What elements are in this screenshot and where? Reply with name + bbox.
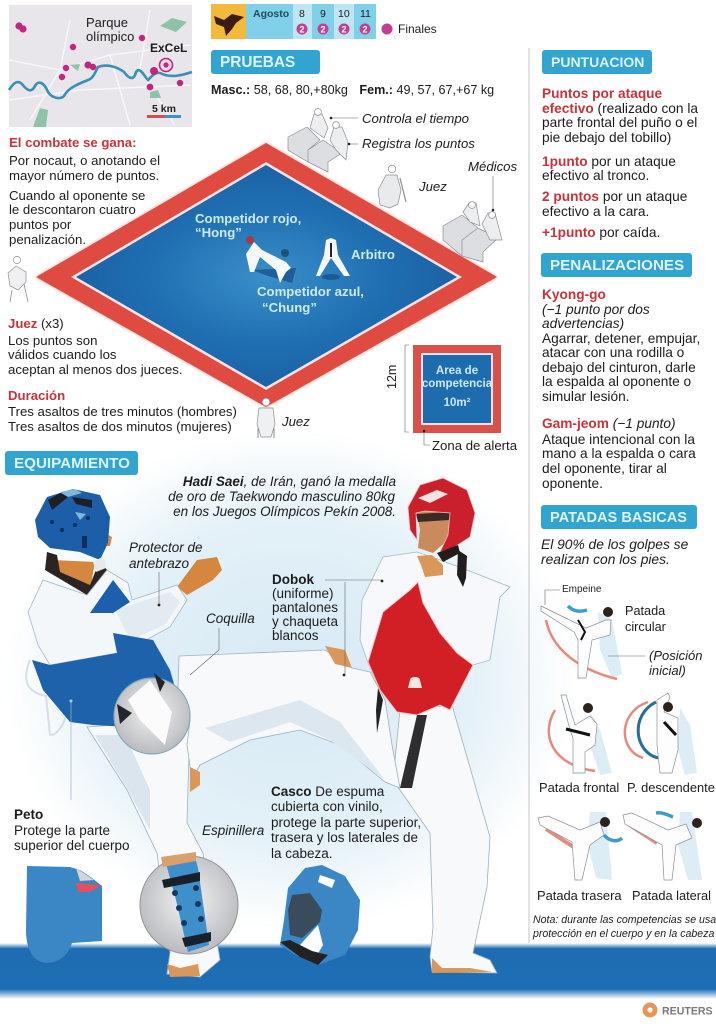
diagram: competition mat: Arbitro: [351, 247, 395, 262]
calendar strip: 11: [360, 8, 371, 20]
text: combat wins: [9, 135, 160, 247]
kick: downward: P. descendente: [627, 780, 715, 795]
text: combat wins: El combate se gana:: [9, 135, 137, 150]
label: doctors: [468, 159, 518, 211]
hands: [417, 555, 443, 577]
blue protector upper: [90, 580, 130, 613]
back strap: [26, 660, 66, 735]
fighters on mat: [246, 236, 296, 283]
diagram: competition mat: [36, 143, 497, 407]
label: forearm guard: Protector de: [129, 540, 203, 555]
chin strap: [437, 545, 460, 562]
heading: pruebas: PRUEBAS: [220, 54, 295, 71]
judge top right: [378, 165, 406, 208]
text: combat wins: le descontaron cuatro: [9, 202, 136, 217]
text: penalties: debajo del cinturon, darle: [542, 360, 696, 375]
label: doctors: Médicos: [468, 159, 518, 174]
calendar strip: [211, 4, 437, 39]
text: scoring: parte frontal del puño o el: [542, 115, 697, 130]
map: London venues: Parque: [86, 15, 128, 30]
heading: equipment: EQUIPAMIENTO: [14, 455, 130, 472]
label: helmet text: trasera y los laterales de: [271, 830, 418, 845]
Reuters logo: [642, 1002, 713, 1018]
heading: equipment: [5, 451, 138, 475]
calendar strip: Finales: [398, 22, 437, 36]
text: judges: válidos cuando los: [8, 347, 117, 362]
judge bottom: [257, 398, 275, 438]
text: scoring: efectivo a la cara.: [542, 204, 649, 219]
label: shin guard: Espinillera: [202, 823, 265, 838]
label: helmet text: Casco De espuma: [271, 784, 385, 799]
caption: Hadi Saei: Hadi Saei, de Irán, ganó la medalla: [183, 474, 396, 489]
referee on mat: [316, 238, 350, 280]
text: scoring: 2 puntos por un ataque: [542, 189, 687, 204]
heading: basic kicks: [541, 505, 697, 529]
text: penalties: [542, 287, 700, 491]
calendar strip: 8: [299, 8, 305, 20]
calendar strip: 2: [341, 24, 347, 34]
kick: side: Patada lateral: [632, 888, 711, 903]
kick: circular: [541, 584, 702, 679]
kicking foot: [190, 767, 200, 792]
kick: circular: (Posición: [649, 648, 702, 663]
text: combat wins: Cuando al oponente se: [9, 188, 145, 203]
helmet: [408, 478, 475, 552]
jacket: [28, 570, 187, 665]
text: penalties: Ataque intencional con la: [542, 432, 695, 447]
calendar strip: 2: [362, 24, 368, 34]
label: records points: Registra los puntos: [362, 136, 475, 151]
note: Nota: durante las competencias se usa: [533, 914, 716, 926]
text: combat wins: penalización.: [9, 232, 86, 247]
note: [532, 914, 716, 940]
label: judge: Juez: [418, 179, 447, 194]
kick: circular: inicial): [649, 663, 686, 678]
heading: penalties: PENALIZACIONES: [550, 257, 684, 274]
column divider: [528, 48, 530, 945]
text: kicks intro: realizan con los pies.: [541, 552, 670, 567]
note: protección en el cuerpo y en la cabeza: [532, 928, 714, 940]
text: combat wins: puntos por: [9, 217, 72, 232]
belt: [400, 715, 427, 788]
text: combat wins: Por nocaut, o anotando el: [9, 153, 160, 168]
diagram: competition area square: 10m²: [444, 397, 471, 409]
jacket: [360, 552, 510, 690]
floor: [0, 943, 716, 999]
kick: back: Patada trasera: [537, 888, 622, 903]
label: dobok: pantalones: [272, 600, 338, 615]
skin: neck, face, fist: [53, 532, 222, 595]
label: judge bottom: Juez: [281, 414, 310, 429]
kick: back: [537, 812, 622, 903]
map: London venues: 5 km: [152, 103, 176, 115]
weight classes: Masc.: 58, 68, 80,+80kg Fem.: 49, 57, 67,+67 kg: [211, 83, 494, 97]
text: penalties: simular lesión.: [542, 389, 629, 404]
label: dobok: [272, 572, 383, 676]
text: penalties: del oponente, tirar al: [542, 461, 667, 476]
diagram: competition area square: Zona de alerta: [432, 438, 518, 453]
fighter: blue: [26, 489, 222, 977]
text: penalties: Agarrar, detener, empujar,: [542, 331, 700, 346]
text: penalties: Kyong-go: [542, 287, 606, 302]
kicking leg: [178, 650, 400, 788]
heading: penalties: [541, 253, 692, 277]
standing leg: [393, 705, 497, 973]
heading: scoring: PUNTUACION: [551, 54, 644, 70]
fighter: red: [178, 478, 510, 973]
text: kicks intro: [541, 537, 689, 567]
map: London venues: olímpico: [86, 29, 134, 44]
leader: chest guard: [70, 700, 72, 800]
label: chest guard: Protege la parte: [14, 823, 110, 838]
Reuters logo: REUTERS: [662, 1006, 713, 1018]
map: London venues: ExCeL: [150, 41, 187, 55]
text: judges: Juez (x3): [8, 316, 64, 331]
kick: circular: Empeine: [562, 584, 602, 595]
text: penalties: oponente.: [542, 476, 603, 491]
equipment: chest protector: [26, 866, 102, 963]
helmet: [35, 489, 110, 560]
diagram: competition mat: Competidor rojo,: [195, 211, 301, 226]
calendar strip: 9: [320, 8, 326, 20]
text: penalties: mano a la espalda o cara: [542, 446, 696, 461]
officials: timekeeper and scorer: [288, 109, 348, 172]
kick: circular: circular: [625, 620, 667, 634]
diagram: competition area square: 12m: [385, 365, 399, 389]
magnifier: shin guard: [140, 852, 238, 954]
kick: front: Patada frontal: [539, 780, 619, 795]
leader: forearm: [158, 572, 160, 606]
text: scoring: Puntos por ataque: [542, 86, 663, 101]
text: judges: aceptan al menos dos jueces.: [8, 362, 182, 377]
magnifier: groin guard: [114, 673, 190, 754]
kick: side: [623, 812, 711, 903]
label: dobok: (uniforme): [272, 586, 334, 601]
calendar strip: 2: [299, 24, 305, 34]
label: chest guard: Peto: [14, 807, 43, 822]
text: penalties: la espalda al oponente o: [542, 374, 692, 389]
text: scoring: efectivo (realizado con la: [542, 101, 698, 116]
blue protector lower: [32, 633, 180, 727]
doctors: [443, 202, 502, 262]
equipment: helmet: [280, 865, 360, 965]
caption: Hadi Saei: [168, 474, 396, 519]
diagram: competition area square: Area de: [436, 365, 478, 377]
label: controls time: Controla el tiempo: [362, 111, 469, 126]
kick: circular: Patada: [625, 604, 666, 618]
text: duration: [8, 388, 237, 434]
calendar strip: 10: [338, 8, 350, 20]
label: helmet text: la cabeza.: [271, 846, 333, 861]
caption: Hadi Saei: de oro de Taekwondo masculino 80kg: [168, 489, 395, 504]
text: judges: Los puntos son: [8, 333, 97, 348]
text: scoring: 1punto por un ataque: [542, 154, 676, 169]
diagram: competition area square: competencia: [422, 378, 493, 390]
diagram: competition mat: Competidor azul,: [257, 284, 364, 299]
label: helmet text: [271, 784, 421, 861]
calendar strip: 2: [320, 24, 326, 34]
text: penalties: (−1 punto por dos: [542, 302, 650, 317]
text: penalties: Gam-jeom (−1 punto): [542, 416, 676, 431]
label: dobok: Dobok: [272, 572, 314, 587]
text: duration: Tres asaltos de dos minutos (mujeres): [8, 419, 232, 434]
label: chest guard: [14, 807, 130, 853]
collar: [45, 552, 107, 595]
diagram: competition mat: “Chung”: [262, 300, 317, 315]
background wash behind fighters: [5, 430, 575, 930]
label: groin guard: Coquilla: [206, 611, 255, 626]
caption: Hadi Saei: en los Juegos Olímpicos Pekín 2008.: [173, 504, 396, 519]
text: kicks intro: El 90% de los golpes se: [541, 537, 689, 552]
label: dobok: y chaqueta: [272, 614, 339, 629]
heading: pruebas: [211, 50, 320, 74]
text: duration: Tres asaltos de tres minutos (hombres): [8, 404, 237, 419]
kick: front: [539, 695, 619, 795]
map: London venues: [9, 5, 192, 127]
label: dobok: blancos: [272, 628, 319, 643]
label: groin guard: [190, 611, 255, 675]
calendar strip: Agosto: [253, 8, 289, 20]
label: helmet text: cubierta con vinilo,: [271, 799, 383, 814]
standing leg: [87, 720, 220, 977]
text: duration: Duración: [8, 388, 65, 403]
kick: downward: [625, 693, 715, 795]
text: judges: [8, 316, 182, 377]
face: [416, 510, 450, 553]
heading: basic kicks: PATADAS BASICAS: [550, 510, 687, 526]
diagram: competition area square: [385, 345, 518, 453]
label: helmet text: protege la parte superior,: [271, 815, 421, 830]
heading: scoring: [542, 50, 652, 74]
text: penalties: atacar con una rodilla o: [542, 345, 685, 360]
red protector: [368, 582, 473, 715]
text: scoring: efectivo al tronco.: [542, 168, 649, 183]
text: combat wins: mayor número de puntos.: [9, 168, 159, 183]
text: scoring: pie debajo del tobillo): [542, 130, 671, 145]
label: chest guard: superior del cuerpo: [14, 838, 130, 853]
judge left: [8, 256, 28, 302]
hand on thigh: [325, 646, 352, 668]
text: scoring: [542, 86, 698, 240]
black collar strip: [457, 550, 467, 587]
label: forearm guard: antebrazo: [129, 556, 190, 571]
text: scoring: +1punto por caída.: [542, 225, 660, 240]
text: penalties: advertencias): [542, 316, 624, 331]
diagram: competition mat: “Hong”: [195, 225, 242, 240]
